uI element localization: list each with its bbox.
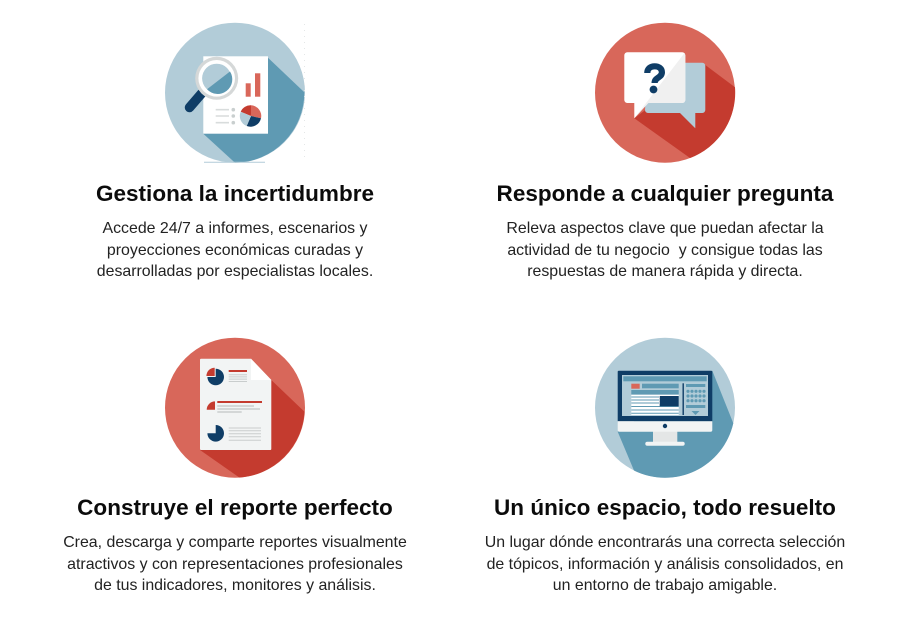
heading: Gestiona la incertidumbre [96, 181, 374, 206]
icon: document with pie charts [165, 338, 305, 478]
text block: Un lugar dónde encontrarás una correcta selección de tópicos, información y análisis consolidados, en un entorno de trabajo amigable. [485, 534, 845, 594]
icon: speech bubbles with question mark [595, 22, 736, 163]
heading: Construye el reporte perfecto [77, 495, 393, 520]
panel: construye el reporte perfecto [63, 338, 407, 594]
icon: desktop monitor [595, 338, 735, 478]
text block: Accede 24/7 a informes, escenarios y proyecciones económicas curadas y desarrolladas por especialistas locales. [97, 220, 373, 280]
icon: report with magnifying glass [165, 22, 305, 163]
panel: un único espacio, todo resuelto [485, 338, 845, 594]
text block: Crea, descarga y comparte reportes visualmente atractivos y con representaciones profesionales de tus indicadores, monitores y análisis. [63, 534, 407, 594]
heading: Responde a cualquier pregunta [497, 181, 833, 206]
heading: Un único espacio, todo resuelto [494, 495, 836, 520]
panel: responde a cualquier pregunta [497, 22, 834, 280]
panel: gestiona la incertidumbre [96, 22, 374, 280]
text block: Releva aspectos clave que puedan afectar la actividad de tu negocio y consigue todas las respuestas de manera rápida y directa. [506, 220, 824, 280]
